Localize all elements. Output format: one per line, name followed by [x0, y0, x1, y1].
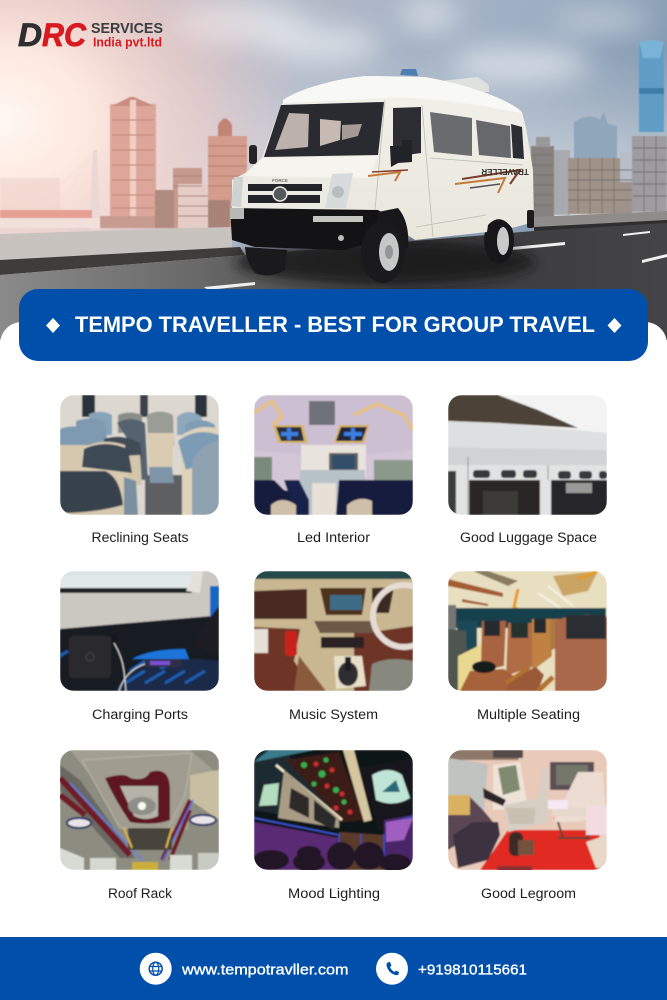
- headlights: [325, 173, 353, 208]
- title banner: [19, 289, 648, 361]
- logo: DRC Services India pvt.ltd: India pvt.ltd: [93, 34, 162, 50]
- photo: roof rack: [60, 750, 219, 870]
- side windows: [393, 107, 524, 159]
- label: multiple seating: Multiple Seating: [477, 707, 580, 722]
- side mirrors: [390, 140, 412, 167]
- bumper: [230, 208, 392, 250]
- diamond left: [46, 318, 60, 333]
- icon: globe: [140, 953, 172, 985]
- white content panel: [0, 322, 667, 982]
- label: charging ports: Charging Ports: [92, 707, 188, 722]
- lane markings: [204, 231, 667, 290]
- phone number: +919810115661: [418, 962, 527, 978]
- logo: DRC Services India pvt.ltd: D: [18, 17, 42, 53]
- far front wheel: [245, 247, 287, 275]
- label: mood lighting: Mood Lighting: [288, 886, 380, 901]
- left skyline: [0, 97, 247, 230]
- photo: good luggage space: [448, 395, 607, 515]
- logo: DRC Services India pvt.ltd: [18, 17, 163, 53]
- hero photo: city highway backdrop: [0, 0, 667, 340]
- side graphics: TRAVELLER: [481, 167, 529, 176]
- photo: charging ports: [60, 571, 219, 691]
- grille: [245, 177, 326, 208]
- heading: TEMPO TRAVELLER - BEST FOR GROUP TRAVEL: [75, 312, 595, 337]
- photo: reclining seats: [60, 395, 219, 515]
- logo: DRC Services India pvt.ltd: SERVICES: [91, 20, 163, 37]
- photo: mood lighting: [253, 750, 413, 872]
- website: www.tempotravller.com: [181, 962, 348, 978]
- hood line: [245, 156, 378, 178]
- side graphics: [368, 167, 529, 193]
- body: [232, 76, 534, 240]
- rear wheel: [484, 216, 514, 264]
- label: reclining seats: Reclining Seats: [92, 530, 189, 545]
- photo: LED interior: [254, 395, 413, 515]
- right skyline: [531, 40, 667, 218]
- photo: multiple seating: [448, 571, 607, 691]
- windshield: [264, 102, 384, 157]
- roof equipment: [400, 69, 418, 76]
- label: good luggage space: Good Luggage Space: [460, 530, 597, 545]
- diamond right: [608, 318, 622, 333]
- grille: FORCE: [272, 178, 288, 183]
- road barrier: [0, 227, 232, 262]
- photo: good legroom: [448, 750, 607, 872]
- photo: music system: [254, 571, 413, 691]
- label: music system: Music System: [289, 707, 378, 722]
- footer contact bar: [0, 937, 667, 1000]
- icon: phone: [376, 953, 408, 985]
- tempo traveller van: [230, 69, 534, 283]
- road surface: [0, 223, 667, 340]
- label: roof rack: Roof Rack: [108, 886, 172, 901]
- label: good legroom: Good Legroom: [481, 886, 576, 901]
- label: LED interior: Led Interior: [297, 530, 371, 545]
- front wheel: [361, 208, 408, 283]
- logo: DRC Services India pvt.ltd: RC: [42, 17, 87, 53]
